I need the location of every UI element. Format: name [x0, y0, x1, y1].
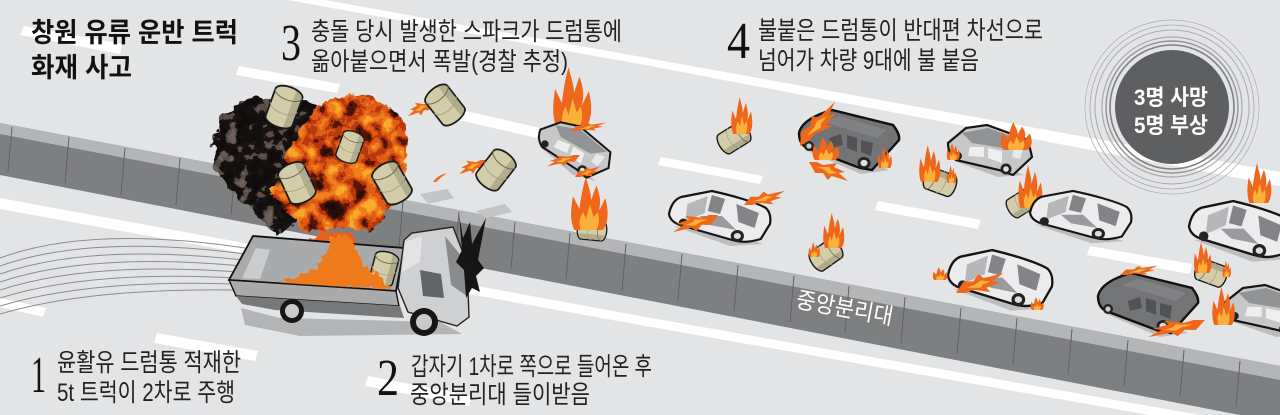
step 4: 4	[727, 13, 750, 70]
step 2: 갑자기 1차로 쪽으로 들어온 후	[411, 353, 652, 381]
burning cars	[530, 67, 1280, 337]
car 7	[933, 250, 1052, 311]
impact spikes	[456, 214, 486, 298]
car 1	[530, 67, 619, 185]
step 4: 넘어가 차량 9대에 불 붙음	[758, 47, 979, 75]
lower road markings	[0, 198, 1200, 415]
step 3: 옮아붙으면서 폭발(경찰 추정)	[311, 48, 568, 76]
step 1: 5t 트럭이 2차로 주행	[57, 379, 235, 407]
car 4	[669, 191, 785, 246]
step 1: 1	[31, 347, 46, 404]
car 2	[790, 102, 899, 181]
central median barrier	[0, 123, 1280, 415]
bed side panel	[229, 280, 399, 306]
car 3	[947, 122, 1032, 177]
flames in bed	[270, 236, 392, 288]
black smoke	[212, 98, 320, 236]
burning drums on road	[571, 97, 1231, 289]
skid marks	[0, 239, 245, 314]
casualties badge	[1085, 20, 1259, 194]
step 2: 중앙분리대 들이받음	[410, 381, 590, 409]
label: median: 중앙분리대	[794, 286, 895, 330]
upper road markings	[20, 0, 1280, 274]
step 3: 충돌 당시 발생한 스파크가 드럼통에	[311, 18, 622, 46]
title	[31, 18, 238, 83]
car 9	[1212, 285, 1280, 337]
fire cloud	[272, 94, 410, 232]
truck	[229, 227, 469, 336]
cargo bed	[229, 236, 404, 291]
flying drums	[263, 81, 519, 208]
step 4: 불붙은 드럼통이 반대편 차선으로	[758, 17, 1043, 45]
badge text: 5명 부상	[1134, 113, 1208, 138]
step 2: 2	[377, 350, 399, 407]
flames of flying drums	[408, 102, 486, 182]
badge text	[1134, 85, 1208, 138]
fire stem	[270, 232, 395, 290]
step 1: 윤활유 드럼통 적재한	[57, 349, 241, 377]
cab	[398, 227, 469, 326]
debris shadows	[420, 189, 512, 218]
step 4	[727, 13, 1043, 75]
car 5	[1030, 191, 1131, 243]
truck shadow	[241, 308, 462, 336]
front wheel	[410, 308, 438, 336]
title: 화재 사고	[31, 53, 132, 83]
step 1	[31, 347, 241, 407]
car 6	[1189, 163, 1280, 262]
step 2	[377, 350, 652, 409]
rear wheel	[280, 299, 304, 323]
badge text: 3명 사망	[1134, 85, 1208, 110]
step 3: 3	[281, 15, 301, 72]
car 8	[1098, 266, 1205, 337]
step 3	[281, 15, 622, 76]
title: 창원 유류 운반 트럭	[31, 18, 238, 48]
chassis	[236, 296, 404, 318]
explosion fireball	[212, 94, 410, 290]
drum in truck	[368, 249, 400, 289]
